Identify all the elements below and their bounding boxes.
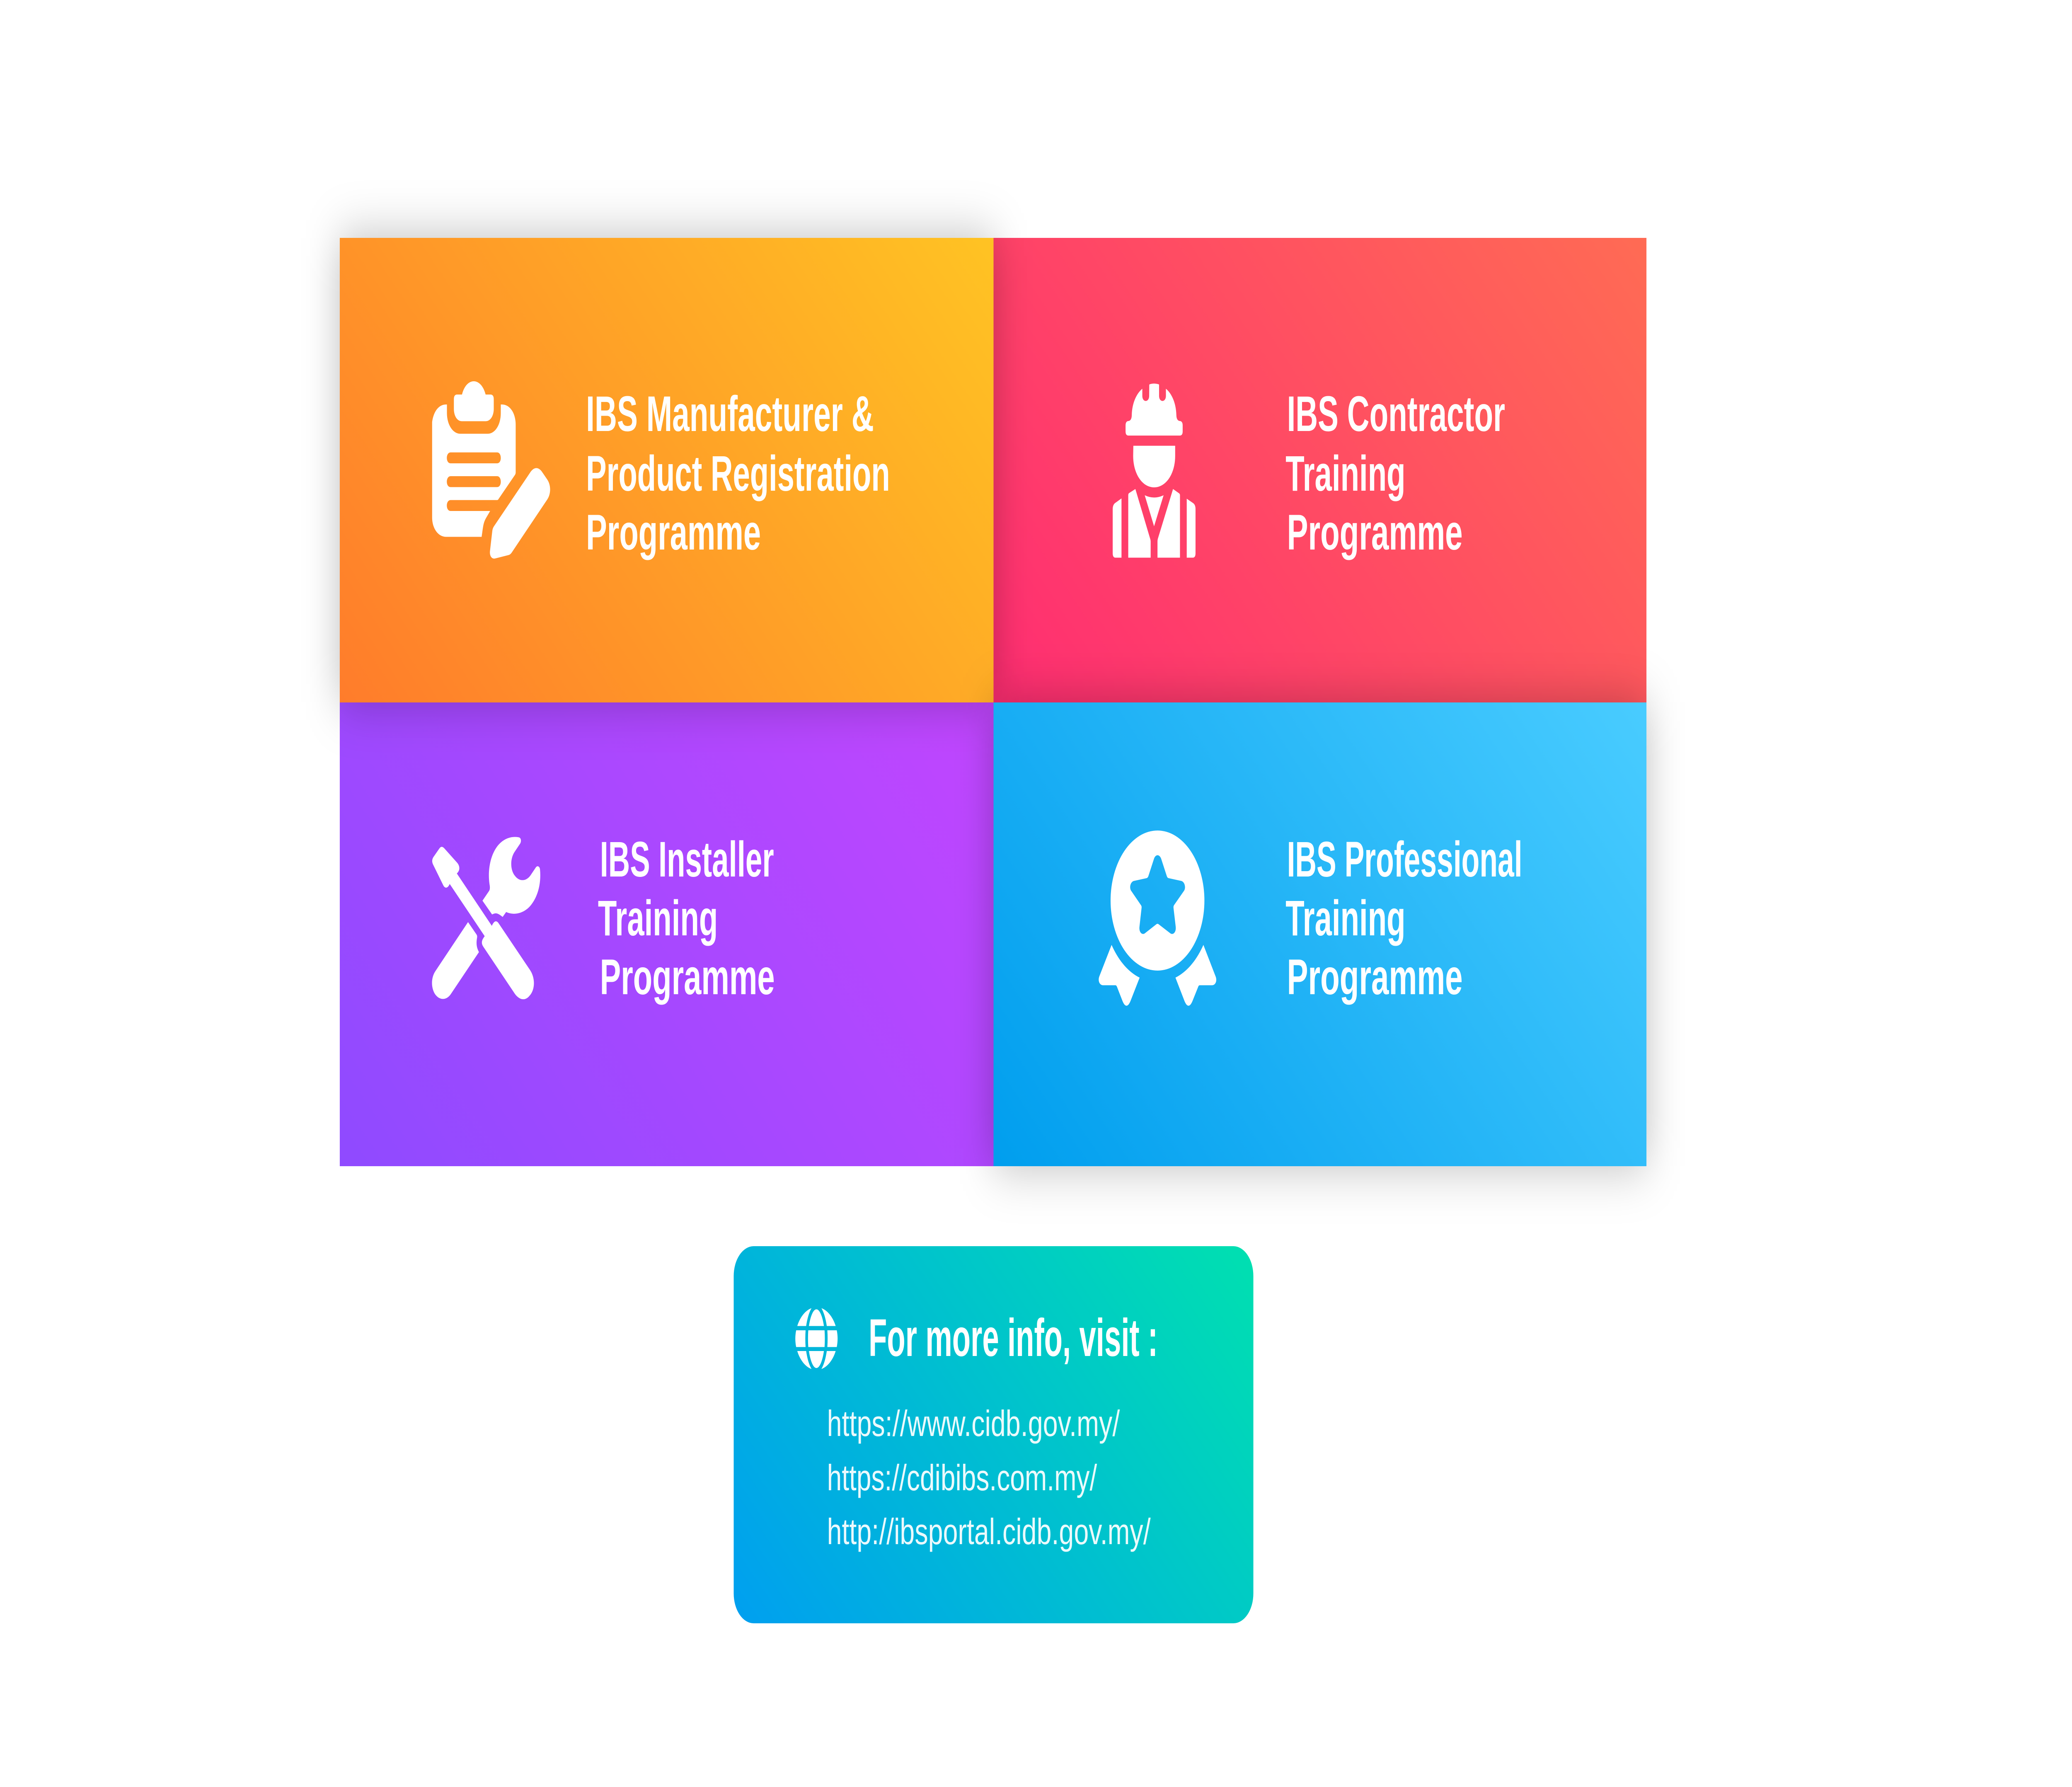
panel: IBS Installer Training Programme	[340, 702, 994, 1166]
text: IBS Manufacturer and Product Registration Programme: Product Registration	[586, 446, 890, 501]
text: IBS Manufacturer and Product Registration Programme: Programme	[586, 504, 761, 560]
panel: more info links	[733, 1246, 1254, 1623]
text: IBS Contractor Training Programme: Training	[1285, 446, 1406, 501]
heading: For more info, visit: For more info, visit :	[869, 1308, 1158, 1368]
text: website links: http://ibsportal.cidb.gov.my/	[827, 1511, 1151, 1552]
text: IBS Manufacturer and Product Registration Programme: IBS Manufacturer &	[586, 386, 874, 442]
panel: IBS Professional Training Programme	[994, 702, 1646, 1166]
text: IBS Installer Training Programme: Programme	[600, 949, 775, 1005]
text: IBS Manufacturer and Product Registration Programme	[586, 386, 890, 560]
text: IBS Professional Training Programme: Programme	[1287, 949, 1463, 1005]
panel: IBS Manufacturer and Product Registration Programme	[340, 238, 994, 702]
text: IBS Professional Training Programme	[1285, 831, 1523, 1005]
text: IBS Installer Training Programme: IBS Installer	[600, 831, 774, 887]
icon: clipboard and pencil	[432, 381, 550, 559]
text: website links	[827, 1403, 1151, 1552]
panel: IBS Contractor Training Programme	[994, 238, 1646, 702]
text: IBS Professional Training Programme: IBS Professional	[1287, 831, 1523, 887]
icon: crossed screwdriver and wrench	[432, 837, 540, 999]
text: IBS Installer Training Programme: Training	[598, 890, 718, 946]
text: IBS Installer Training Programme	[598, 831, 775, 1005]
icon: construction worker	[1113, 383, 1196, 558]
text: IBS Contractor Training Programme	[1285, 386, 1505, 560]
text: IBS Professional Training Programme: Training	[1285, 890, 1406, 946]
text: website links: https://cdibibs.com.my/	[827, 1457, 1097, 1498]
text: IBS Contractor Training Programme: Programme	[1287, 504, 1463, 560]
icon: award badge with star	[1099, 831, 1216, 1006]
text: IBS Contractor Training Programme: IBS Contractor	[1287, 386, 1505, 442]
text: website links: https://www.cidb.gov.my/	[827, 1403, 1120, 1444]
icon: globe	[795, 1308, 838, 1369]
